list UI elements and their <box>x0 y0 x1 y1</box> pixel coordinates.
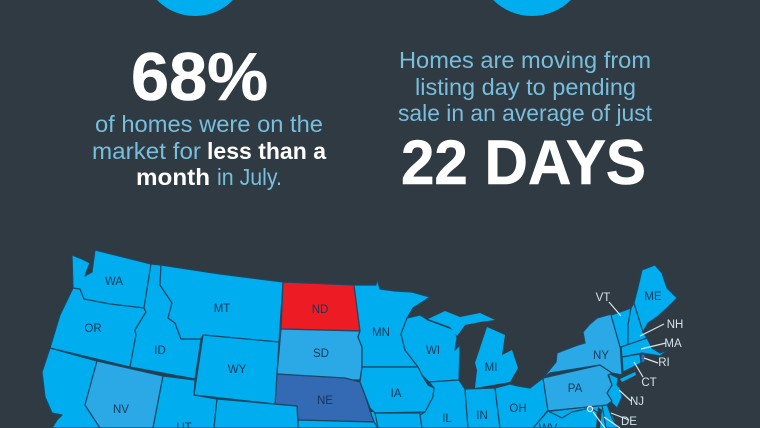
state: New Jersey <box>607 373 622 408</box>
left description: of homes were on the <box>95 111 323 137</box>
state: Oregon <box>50 288 146 367</box>
icon circle: left <box>142 0 248 16</box>
state labels inside the map: OH <box>509 403 527 415</box>
state labels inside the map: PA <box>568 383 583 395</box>
state: New Hampshire <box>628 303 647 345</box>
right statistic <box>398 47 653 198</box>
state: California <box>42 348 100 428</box>
state: Massachusetts <box>621 338 668 357</box>
state: Rhode Island <box>641 354 645 363</box>
state labels inside the map: WY <box>228 364 247 376</box>
state labels inside the map: ME <box>644 291 662 303</box>
right description: listing day to pending <box>415 74 636 100</box>
state labels inside the map: MI <box>485 362 497 374</box>
state: Illinois <box>420 380 468 428</box>
state: New York <box>543 314 622 378</box>
state labels inside the map: IA <box>391 388 402 400</box>
left description: in July. <box>217 164 282 190</box>
state labels inside the map: ND <box>312 304 328 316</box>
state labels inside the map: WI <box>426 345 440 357</box>
state: Utah <box>153 376 217 428</box>
state: Indiana <box>465 388 500 428</box>
right description: Homes are moving from <box>399 47 651 73</box>
state labels inside the map <box>84 276 662 428</box>
state: Idaho <box>130 264 201 379</box>
state: Nebraska <box>275 374 374 422</box>
state: Wisconsin <box>401 315 460 382</box>
state: Washington <box>72 250 151 308</box>
state: Iowa <box>360 367 434 413</box>
left description: less than a <box>207 138 326 164</box>
state: North Dakota <box>281 282 360 331</box>
state labels inside the map: ID <box>154 345 166 357</box>
state: Nevada <box>85 361 163 428</box>
state labels inside the map: NE <box>317 395 333 407</box>
state: Connecticut <box>622 354 641 372</box>
state labels inside the map: IL <box>442 413 452 425</box>
state: South Dakota <box>277 329 362 380</box>
left description: month <box>136 164 210 190</box>
state: Wyoming <box>194 335 279 404</box>
state labels inside the map: IN <box>476 410 488 422</box>
right description <box>398 47 653 126</box>
left description <box>92 111 326 190</box>
state labels inside the map: MN <box>372 327 390 339</box>
state: Delaware and Delmarva <box>602 404 618 428</box>
state labels inside the map: MT <box>214 303 230 315</box>
state: Pennsylvania <box>543 365 612 411</box>
callout labels with leader lines <box>587 292 683 428</box>
state: Kansas <box>298 420 378 428</box>
state: Maine <box>634 265 677 332</box>
state: Michigan upper peninsula <box>428 311 495 336</box>
state labels inside the map: SD <box>313 348 329 360</box>
US map <box>42 250 683 428</box>
state: Minnesota <box>354 279 430 367</box>
callout labels with leader lines: RI <box>658 357 670 369</box>
state: Vermont <box>611 308 631 347</box>
callout labels with leader lines: CT <box>641 377 657 389</box>
state: Michigan lower peninsula <box>475 327 518 388</box>
state: Montana <box>160 265 283 342</box>
southern states base <box>100 405 618 428</box>
callout labels with leader lines: MA <box>664 338 682 350</box>
state: Ohio <box>495 378 548 428</box>
icon circle: right <box>477 0 587 16</box>
water: Chesapeake Bay <box>596 407 602 428</box>
state: Missouri <box>375 413 422 428</box>
state labels inside the map: OR <box>84 323 102 335</box>
state labels inside the map: WA <box>105 276 123 288</box>
big number 68%: 68% <box>131 39 268 115</box>
state: Colorado <box>214 399 298 428</box>
callout labels with leader lines: NH <box>667 319 683 331</box>
left description: market for <box>92 138 201 164</box>
left statistic <box>92 39 326 190</box>
state: Long Island <box>620 372 636 382</box>
callout labels with leader lines: NJ <box>630 396 644 408</box>
big number 22 DAYS: 22 DAYS <box>401 128 646 198</box>
callout labels with leader lines: DE <box>621 416 637 428</box>
state labels inside the map: NV <box>113 404 129 416</box>
callout labels with leader lines: VT <box>596 292 610 304</box>
right description: sale in an average of just <box>398 100 653 126</box>
state: Virginia and Maryland region <box>533 408 598 428</box>
state labels inside the map: NY <box>593 350 609 362</box>
